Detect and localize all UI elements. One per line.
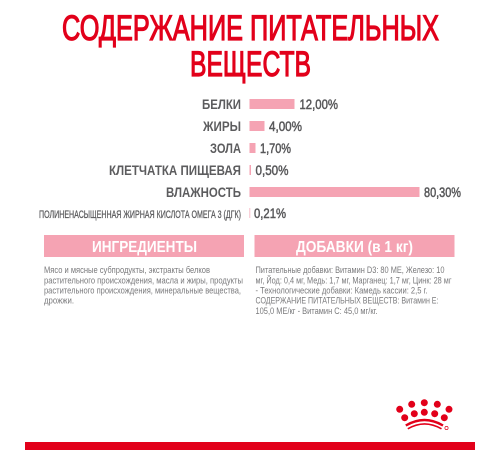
row: fat: 4,00% <box>269 119 302 134</box>
bar chart: nutrients <box>39 97 461 221</box>
row: protein: 12,00% <box>300 97 338 112</box>
text: additives: 105,0 МЕ/кг - Витамин С: 45,0 мг/кг. <box>256 306 378 316</box>
heading: ingredients <box>44 235 244 257</box>
text: ingredients: растительного происхождения, масла и жиры, продукты <box>44 275 243 285</box>
row: ash <box>210 141 291 156</box>
row: protein: БЕЛКИ <box>202 97 241 112</box>
text: ingredients: Мясо и мясные субпродукты, экстракты белков <box>44 265 210 275</box>
row: moisture <box>166 185 461 200</box>
heading: additives: ДОБАВКИ (в 1 кг) <box>296 239 413 256</box>
row: ash: 1,70% <box>260 141 291 156</box>
icon: royal canin crown logo <box>396 399 452 430</box>
row: fat <box>202 119 302 134</box>
row: fibre: КЛЕТЧАТКА ПИЩЕВАЯ <box>109 163 241 178</box>
title: ВЕЩЕСТВ <box>190 45 311 84</box>
panel: additives <box>254 235 454 316</box>
row: moisture: 80,30% <box>424 185 461 200</box>
row: fat: ЖИРЫ <box>202 119 241 134</box>
text: ingredients: дрожжи. <box>44 296 74 306</box>
row: moisture: ВЛАЖНОСТЬ <box>166 185 241 200</box>
row: omega 3 <box>39 206 286 221</box>
row: fibre: 0,50% <box>256 163 288 178</box>
text: additives: СОДЕРЖАНИЕ ПИТАТЕЛЬНЫХ ВЕЩЕСТВ: Витамин Е: <box>256 296 438 306</box>
row: protein <box>202 97 338 112</box>
row: omega 3: ПОЛИНЕНАСЫЩЕННАЯ ЖИРНАЯ КИСЛОТА ОМЕГА 3 (ДГК) <box>39 209 241 221</box>
heading: ingredients: ИНГРЕДИЕНТЫ <box>92 239 197 256</box>
footer bar <box>25 442 475 450</box>
text: additives: мг, Йод: 0,4 мг, Медь: 1,7 мг, Марганец: 1,7 мг, Цинк: 28 мг <box>256 274 452 285</box>
row: ash: ЗОЛА <box>210 141 241 156</box>
text: additives: - Технологические добавки: Камедь кассии: 2,5 г. <box>256 286 428 296</box>
text: additives: Питательные добавки: Витамин D3: 80 МЕ, Железо: 10 <box>256 265 444 275</box>
title <box>62 9 439 84</box>
row: omega 3: 0,21% <box>254 206 286 221</box>
text: ingredients: растительного происхождения, минеральные вещества, <box>44 286 241 296</box>
panel: ingredients <box>44 235 246 306</box>
heading: additives <box>254 235 454 257</box>
